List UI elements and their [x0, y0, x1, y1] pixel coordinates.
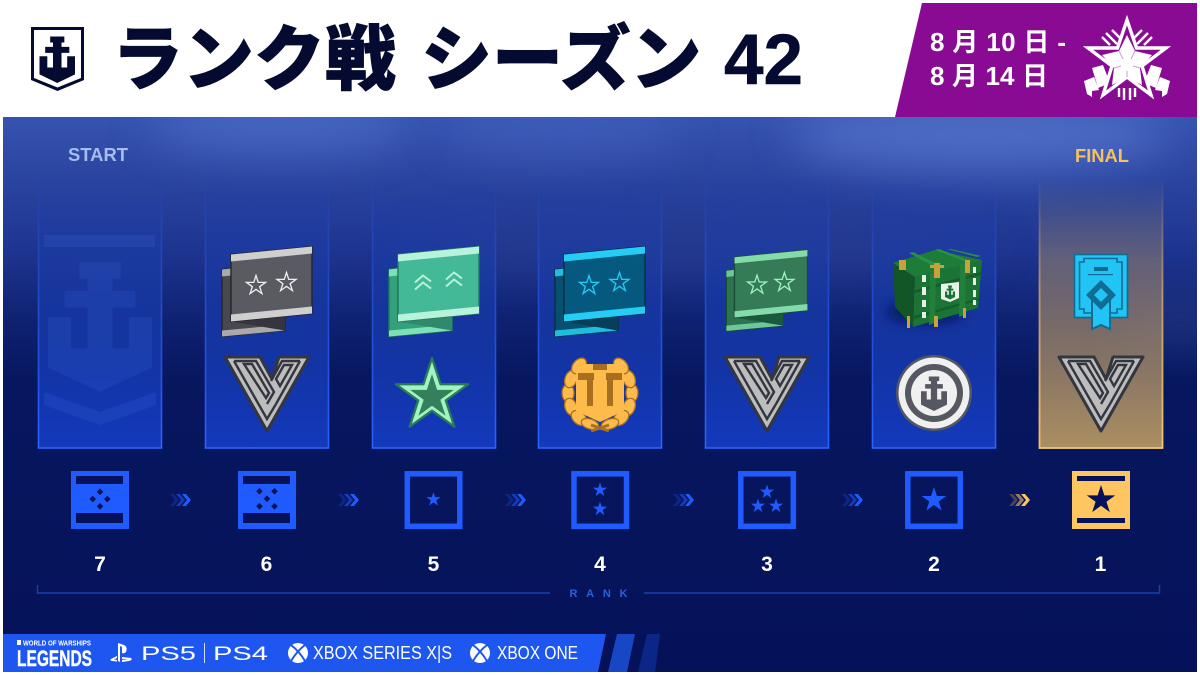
logo: World of Warships Legends: LEGENDS [17, 646, 92, 671]
rank numbers: 4 [594, 553, 606, 576]
label: START: START [68, 145, 128, 165]
title: シーズン [421, 21, 701, 100]
logo: Xbox Series X|S: XBOX SERIES X|S [313, 643, 452, 663]
rank numbers: 6 [261, 553, 272, 576]
arrow 5 to 4 [505, 494, 526, 506]
rank icon 3 [741, 474, 793, 526]
logo: World of Warships Legends [17, 640, 92, 671]
icon: grey ribbon with two stars [222, 246, 312, 336]
date banner [895, 3, 1197, 117]
rank icon 4 [574, 474, 626, 526]
date text [930, 27, 1066, 91]
arrow 6 to 5 [338, 494, 359, 506]
rank numbers: 1 [1095, 553, 1107, 576]
icon: dark green ribbon with two stars [726, 250, 807, 331]
icon: silver chevron badge [1059, 357, 1143, 431]
title: 42 [724, 21, 803, 100]
icon: silver chevron badge [225, 357, 309, 431]
column 2: rank 6 [206, 178, 328, 448]
column 5: rank 3 [706, 178, 828, 448]
column 6: rank 2 [872, 178, 996, 448]
rank numbers: 2 [928, 553, 940, 576]
icon: green supply crate [887, 249, 982, 328]
rank icon 5 [407, 474, 460, 526]
rank numbers: 7 [94, 553, 106, 576]
rank numbers: 5 [428, 553, 440, 576]
arrow 4 to 3 [673, 494, 694, 506]
icon: season star emblem [1084, 20, 1170, 100]
column 3: rank 5 [372, 178, 496, 448]
logo: PlayStation 5 and 4: PS5 [141, 644, 196, 665]
icon: anchor coin [896, 355, 972, 431]
rank icon 6 [238, 471, 296, 529]
date text: 8 月 10 日 - [930, 27, 1066, 57]
icon: blue certificate [1074, 254, 1128, 329]
rank label: RANK [570, 588, 628, 600]
rank numbers: 3 [761, 553, 773, 576]
rank numbers [94, 553, 1107, 576]
label: FINAL: FINAL [1075, 146, 1129, 166]
title [112, 21, 803, 100]
title: ランク戦 [112, 21, 396, 100]
icon: silver chevron badge [725, 357, 809, 431]
arrow 2 to 1 [1009, 494, 1030, 506]
column 1: start rank 7 [38, 178, 162, 448]
arrow 7 to 6 [170, 494, 191, 506]
date text: 8 月 14 日 [930, 61, 1048, 91]
icon: ghost anchor emblem [44, 235, 156, 425]
icon: teal ribbon with two stars [555, 246, 645, 336]
icon: gold laurel badge [562, 355, 638, 432]
logo: PlayStation 5 and 4: PS4 [213, 644, 269, 665]
icon: green ribbon with chevrons [389, 246, 479, 336]
column 7: final rank 1 [1040, 178, 1162, 448]
logo: Xbox One: XBOX ONE [497, 643, 578, 663]
rank bracket line [38, 585, 1160, 593]
logo: World of Warships Legends: WORLD OF WARSHIPS [23, 640, 91, 648]
rank icon 1 [1072, 471, 1130, 529]
header logo: shield and anchor [31, 27, 84, 91]
icon: green star badge [396, 358, 468, 427]
rank icon 7 [71, 471, 129, 529]
footer bar [3, 634, 660, 672]
logo: PlayStation 5 and 4 [110, 643, 269, 665]
arrow 3 to 2 [842, 494, 863, 506]
column 4: rank 4 [538, 178, 662, 448]
logo: Xbox One [470, 643, 578, 663]
rank icon 2 [908, 474, 960, 526]
